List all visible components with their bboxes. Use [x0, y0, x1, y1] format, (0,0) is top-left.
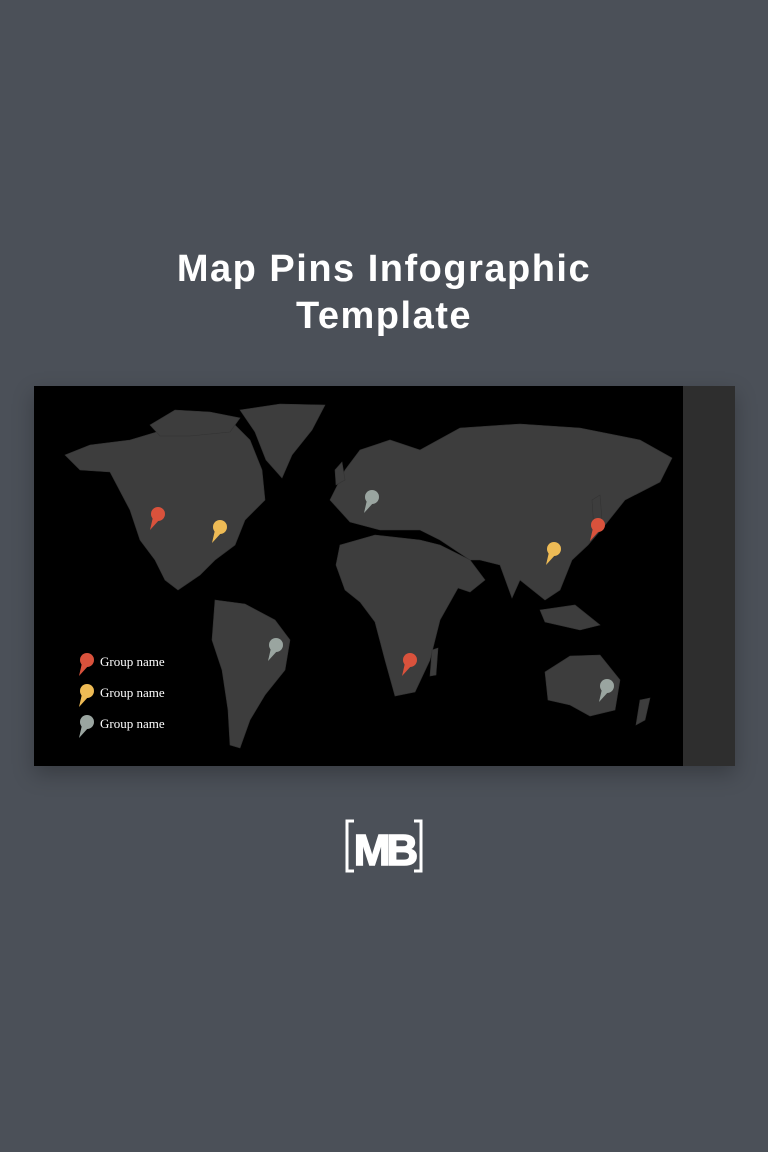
legend: Group name — [100, 654, 165, 669]
legend: Group name — [100, 685, 165, 700]
title — [177, 248, 591, 337]
logo: MB: MB — [354, 826, 416, 874]
legend — [79, 653, 165, 738]
panel: world map — [34, 386, 735, 766]
title: Map Pins Infographic — [177, 248, 591, 290]
pins — [150, 490, 614, 702]
title: Template — [296, 295, 472, 337]
legend: Group name — [100, 716, 165, 731]
map continents — [65, 404, 672, 748]
logo: MB — [346, 820, 422, 874]
